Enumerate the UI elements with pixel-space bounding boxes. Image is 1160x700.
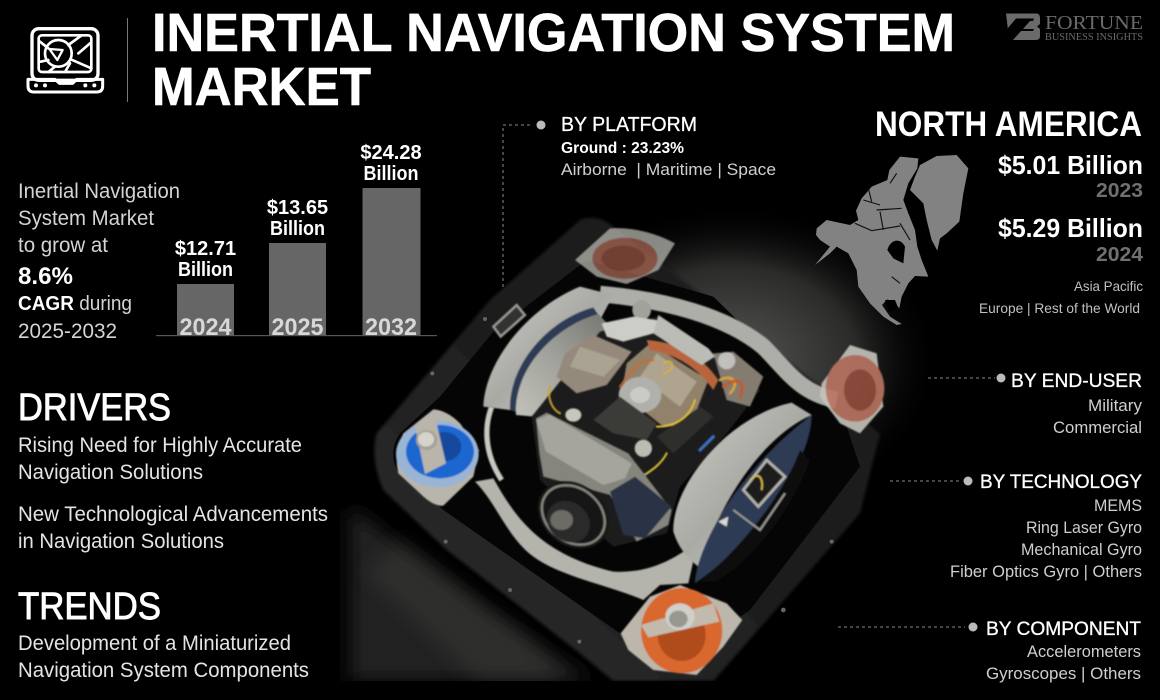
bar 2024 [175,238,236,341]
CAGR text block: to grow at [18,234,108,257]
bar 2024: $12.71 [175,238,236,260]
header icon: laptop with map [28,29,103,92]
right gimbal ring [673,403,812,583]
case cavity [393,260,860,640]
bar 2025: Billion [270,218,325,240]
segment: by end-user: Military [1088,396,1142,415]
segment: by platform: Ground : 23.23% [561,140,684,157]
bar 2025: 2025 [272,314,324,341]
CAGR text block: System Market [18,207,154,230]
trends [18,586,309,682]
segment: by component: BY COMPONENT [986,619,1141,640]
bar 2032: 2032 [365,314,417,341]
central dark body [532,317,760,547]
regional statistics: North America: 2023 [1096,180,1143,202]
device photo: inertial navigation unit [350,203,940,681]
segment: by platform: Airborne | Maritime | Space [561,160,776,179]
blue cap [396,409,479,506]
drivers: DRIVERS [18,387,171,429]
trends: TRENDS [18,586,161,628]
wires [549,360,742,480]
regional statistics: North America: $5.29 Billion [998,213,1143,243]
title: INERTIAL NAVIGATION SYSTEM [152,3,955,63]
segment: by technology: MEMS [1094,496,1142,515]
flywheel drum [538,480,607,548]
CAGR text block: Inertial Navigation [18,180,180,203]
bar 2032: $24.28 [360,142,422,164]
logo: Fortune Business Insights: FORTUNE [1045,12,1143,34]
bar 2024: Billion [178,259,233,281]
CAGR text block [18,180,180,343]
title: MARKET [152,57,371,117]
bar 2032 [360,142,422,341]
trends: Navigation System Components [18,659,309,682]
frame strap [475,294,837,600]
case screws [430,317,834,644]
drivers: Rising Need for Highly Accurate [18,434,302,457]
orange cap [621,585,742,675]
segment: by component: Gyroscopes | Others [986,664,1141,683]
title [152,3,955,117]
segment: by component: Accelerometers [1027,642,1141,661]
drivers: in Navigation Solutions [18,530,224,553]
lower-left case shading [378,542,554,681]
regional statistics: North America: Asia Pacific [1074,278,1143,294]
faded top cap [575,228,675,284]
bar 2025 [267,197,328,341]
regional statistics: North America: Europe | Rest of the World [979,300,1140,316]
segment: by end-user: BY END-USER [1011,371,1142,392]
segment: by end-user [928,371,1142,437]
regional statistics: North America [875,105,1144,316]
map: North America [815,155,968,325]
regional statistics: North America: 2024 [1096,244,1144,266]
segment: by technology: Mechanical Gyro [1021,540,1142,559]
circuit boards [557,300,763,453]
segment: by platform [503,114,776,290]
segment: by technology: Fiber Optics Gyro | Others [950,562,1142,581]
segment: by technology: BY TECHNOLOGY [980,472,1142,493]
background haze [350,203,940,681]
drivers: Navigation Solutions [18,461,203,484]
logo: Fortune Business Insights: BUSINESS INSIGHTS [1045,32,1143,43]
CAGR text block: 2025-2032 [18,320,117,343]
segment: by platform: BY PLATFORM [561,114,697,136]
logo: Fortune Business Insights [1006,12,1143,43]
bar 2032: Billion [364,163,418,185]
drivers: New Technological Advancements [18,503,328,526]
motor housing [536,408,672,542]
CAGR text block: CAGR during [18,293,132,315]
case outer frame [374,218,880,681]
trends: Development of a Miniaturized [18,632,291,655]
segment: by end-user: Commercial [1053,418,1142,437]
drivers [18,387,328,553]
regional statistics: North America: $5.01 Billion [998,150,1143,180]
CAGR text block: 8.6% [18,263,73,290]
segment: by technology: Ring Laser Gyro [1026,518,1142,537]
left gimbal ring [483,287,613,417]
segment: by component [838,619,1141,683]
bar chart: market size [156,142,437,341]
faded right cap [820,345,884,433]
bar 2025: $13.65 [267,197,328,219]
segment: by technology [890,472,1142,581]
bar 2024: 2024 [180,314,232,341]
